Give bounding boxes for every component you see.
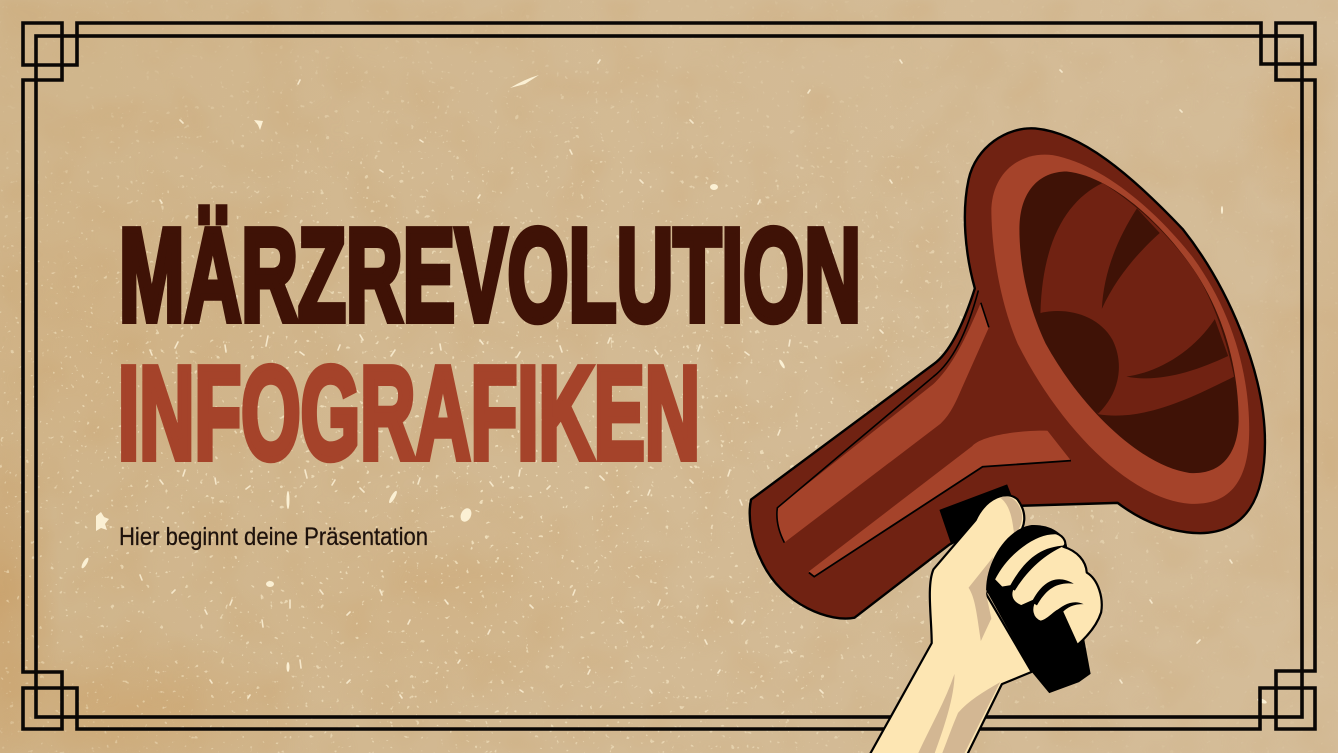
subtitle: Hier beginnt deine Präsentation xyxy=(119,523,428,551)
small scratches xyxy=(140,60,1232,698)
palm and forearm xyxy=(863,495,1032,753)
fist fingers xyxy=(994,533,1102,645)
title: line one: MÄRZREVOLUTION xyxy=(119,202,861,348)
handle top xyxy=(939,484,1021,544)
large paper specks xyxy=(80,75,1267,705)
handle grip xyxy=(986,525,1091,693)
title: line two: INFOGRAFIKEN xyxy=(118,340,700,486)
icon: megaphone held by raised fist xyxy=(750,128,1265,753)
megaphone body and bell xyxy=(750,128,1265,619)
